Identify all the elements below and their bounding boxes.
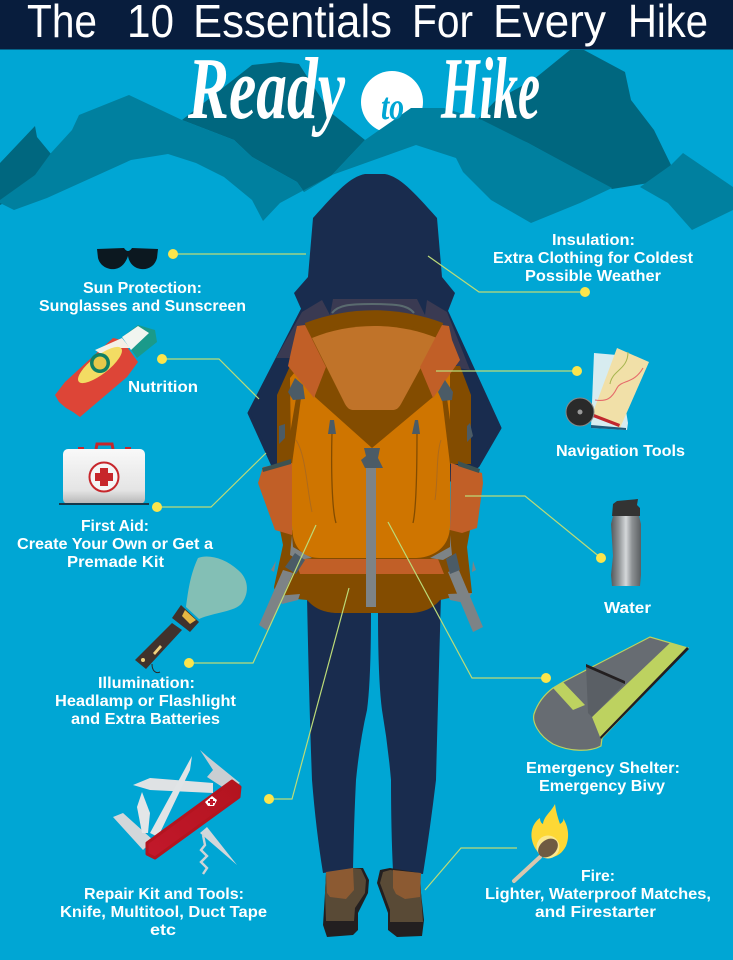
label: first aid bbox=[17, 518, 213, 571]
label: repair kit: etc bbox=[150, 922, 176, 939]
gray hip wings bbox=[290, 535, 452, 560]
label: fire: Fire: bbox=[581, 868, 615, 885]
label: first aid: Create Your Own or Get a bbox=[17, 536, 213, 553]
sun circle bbox=[361, 71, 423, 133]
label: navigation tools: Navigation Tools bbox=[556, 443, 685, 460]
label: insulation: Extra Clothing for Coldest bbox=[493, 250, 693, 267]
Ready to Hike logo: Ready bbox=[187, 41, 346, 138]
right shoulder patch bbox=[420, 325, 460, 398]
pack straps bbox=[277, 366, 471, 464]
label: water: Water bbox=[604, 600, 651, 617]
icon: water bottle bbox=[611, 499, 641, 586]
shoes bbox=[323, 868, 424, 937]
center strap bbox=[366, 467, 376, 607]
label: fire bbox=[485, 868, 711, 921]
icon: map and compass bbox=[566, 348, 649, 430]
pack body bbox=[290, 366, 450, 558]
label: repair kit: Knife, Multitool, Duct Tape bbox=[60, 904, 267, 921]
icon: flashlight bbox=[135, 556, 247, 673]
hip belt base bbox=[274, 530, 472, 613]
label: fire: Lighter, Waterproof Matches, bbox=[485, 886, 711, 903]
buckles bbox=[279, 378, 473, 574]
label: illumination bbox=[55, 675, 236, 728]
header bar bbox=[0, 0, 733, 50]
label: insulation: Possible Weather bbox=[525, 268, 661, 285]
hiker figure bbox=[249, 174, 500, 937]
jacket and hood bbox=[249, 310, 500, 480]
label: first aid: Premade Kit bbox=[67, 554, 164, 571]
left shoulder patch bbox=[288, 325, 326, 398]
icon: first aid kit bbox=[59, 444, 149, 505]
Ready to Hike logo: to bbox=[381, 86, 404, 128]
label: emergency shelter: Emergency Bivy bbox=[539, 778, 665, 795]
label: nutrition: Nutrition bbox=[128, 379, 198, 396]
label: sun protection: Sunglasses and Sunscreen bbox=[39, 298, 246, 315]
label: illumination: and Extra Batteries bbox=[71, 711, 220, 728]
Ready to Hike logo: Hike bbox=[440, 41, 540, 138]
collar bbox=[276, 299, 470, 370]
zips and pocket seams bbox=[296, 432, 441, 523]
side strap overlays bbox=[285, 398, 301, 464]
gray straps bbox=[259, 570, 293, 631]
pack lid bbox=[305, 310, 443, 448]
mountains front layer bbox=[0, 95, 733, 230]
label: illumination: Headlamp or Flashlight bbox=[55, 693, 236, 710]
icon: burning match bbox=[514, 804, 568, 881]
label: illumination: Illumination: bbox=[98, 675, 195, 692]
label: emergency shelter: Emergency Shelter: bbox=[526, 760, 680, 777]
title bbox=[27, 0, 708, 47]
hip belt bbox=[298, 559, 444, 574]
Ready to Hike logo bbox=[187, 41, 540, 138]
label: repair kit: Repair Kit and Tools: bbox=[84, 886, 244, 903]
icon: sleeping bag bbox=[534, 637, 689, 750]
label: fire: and Firestarter bbox=[535, 904, 656, 921]
icon: sunglasses bbox=[97, 248, 158, 269]
icon: nutrition bar bbox=[55, 325, 157, 417]
legs bbox=[307, 596, 371, 873]
label: insulation bbox=[493, 232, 693, 285]
side pockets bbox=[258, 463, 292, 535]
icon: pocket knife bbox=[113, 750, 240, 874]
mountains back layer bbox=[0, 50, 671, 205]
label: repair kit bbox=[60, 886, 267, 939]
label: sun protection: Sun Protection: bbox=[83, 280, 202, 297]
label: emergency shelter bbox=[526, 760, 680, 795]
leader lines bbox=[152, 249, 606, 890]
label: first aid: First Aid: bbox=[81, 518, 149, 535]
label: sun protection bbox=[39, 280, 246, 315]
label: insulation: Insulation: bbox=[552, 232, 635, 249]
